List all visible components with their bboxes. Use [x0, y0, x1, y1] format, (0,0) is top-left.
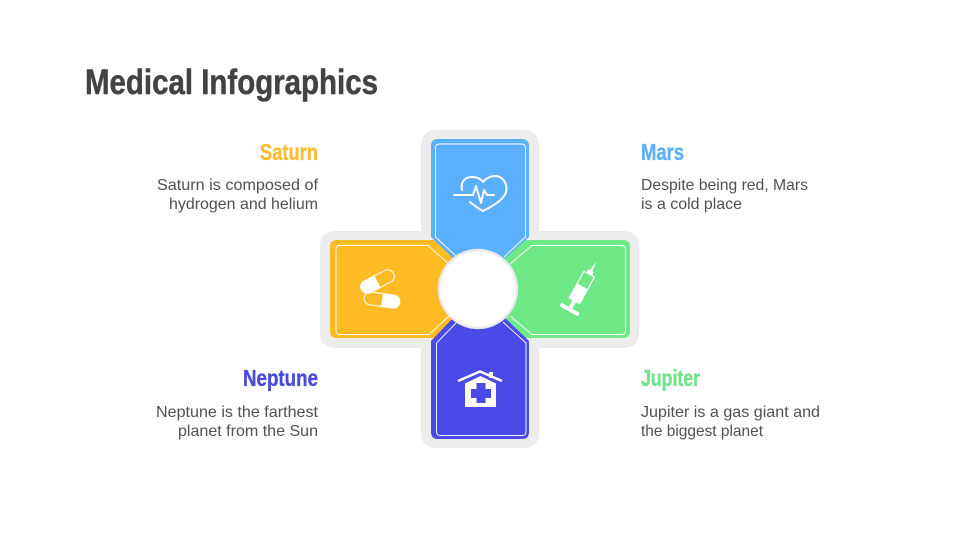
text block: Neptune	[156, 365, 319, 440]
text block: Mars: Despite being red, Mars	[641, 177, 808, 194]
cross diagram	[320, 130, 639, 448]
text block: Mars: Mars	[641, 139, 684, 165]
panel: green Jupiter	[478, 240, 630, 338]
text block: Jupiter: Jupiter	[641, 365, 700, 391]
title: Medical Infographics	[85, 63, 378, 102]
text block: Jupiter: the biggest planet	[641, 423, 764, 440]
panel: indigo Neptune	[431, 292, 529, 439]
text block: Saturn: Saturn is composed of	[157, 177, 319, 194]
text block: Saturn	[157, 139, 319, 213]
text block: Neptune: Neptune	[243, 365, 318, 391]
panel: blue Mars	[431, 139, 529, 282]
text block: Neptune: Neptune is the farthest	[156, 404, 319, 421]
panel: orange Saturn	[330, 240, 478, 338]
text block: Jupiter	[641, 365, 820, 440]
icon: syringe	[559, 256, 606, 316]
center circle	[439, 250, 517, 328]
icon: heart with pulse	[454, 176, 506, 211]
text block: Jupiter: Jupiter is a gas giant and	[641, 404, 820, 421]
text block: Mars: is a cold place	[641, 196, 742, 213]
text block: Saturn: hydrogen and helium	[169, 196, 318, 213]
text block: Saturn: Saturn	[260, 139, 318, 165]
text block: Mars	[641, 139, 808, 213]
cross background	[320, 130, 639, 448]
text block: Neptune: planet from the Sun	[178, 423, 318, 440]
icon: hospital house	[458, 372, 502, 407]
icon: pills	[358, 267, 401, 309]
